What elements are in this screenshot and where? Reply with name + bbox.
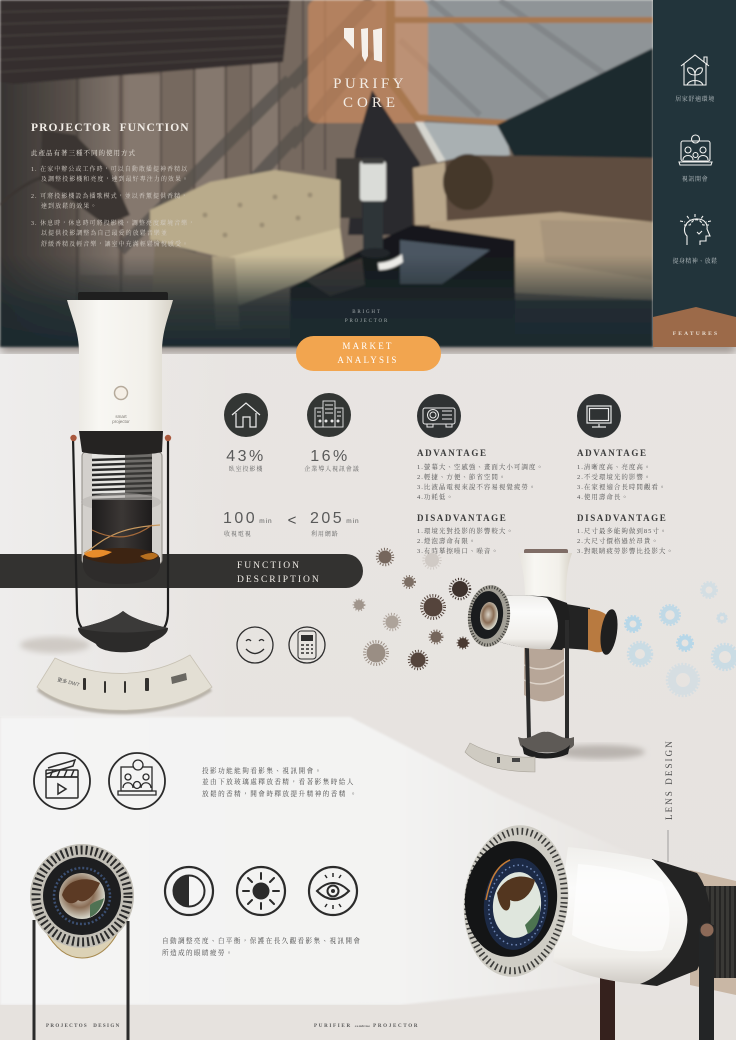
comparison column: projector: 2.輕捷、方便、節省空間。: [417, 472, 506, 481]
hero text: projector function: [31, 122, 195, 248]
stat: 16 percent: [304, 448, 360, 473]
footer captions: PROJECTOS DESIGN: [46, 1024, 121, 1029]
comparison column: television: 4.使用壽命長。: [577, 492, 629, 501]
comparison column: projector: 1.環境光對投影的影響較大。: [417, 526, 514, 535]
text: eye protection: 所造成的眼睛疲勞。: [162, 948, 234, 957]
hero text: projector function: PROJECTOR FUNCTION: [31, 122, 190, 134]
hero text: projector function: 及調整投影機和亮度，達到最好專注力的效果。: [41, 175, 189, 183]
comparison column: television: 2.大尺寸價格過於昂貴。: [577, 536, 659, 545]
window: [392, 0, 653, 122]
comparison column: television: 1.尺寸最多能夠做到85寸。: [577, 526, 667, 535]
tall projector product: [20, 292, 173, 653]
table: [290, 225, 515, 347]
comparison column: projector: ADVANTAGE: [417, 448, 488, 458]
comparison column: projector: DISADVANTAGE: [417, 513, 507, 523]
mini projector: [360, 161, 386, 201]
tall projector product: smart: [115, 414, 127, 419]
logo: [333, 28, 407, 111]
text: projection function: [202, 766, 358, 798]
icon: contrast: [165, 867, 213, 915]
lens design label: [664, 739, 674, 862]
feature icon: refresh: [680, 214, 711, 245]
hero text: projector function: 1. 在家中辦公或工作時，可以自動散播提神香精以: [31, 165, 188, 173]
bright projector caption: BRIGHT: [352, 310, 382, 315]
text: projection function: 並由下放玻璃處釋放香精，看著影集時給人: [202, 777, 355, 786]
function description band: FUNCTION: [237, 561, 301, 571]
hero text: projector function: 達到放鬆的效果。: [41, 202, 97, 210]
light lower panel: [0, 717, 736, 1040]
right sofa: [413, 155, 653, 230]
comparison column: television: [577, 448, 674, 555]
hero text: projector function: 舒緩香精及輕音樂，讓室中充滿輕鬆愉悅感受。: [41, 240, 189, 248]
comparison column: television: 3.對眼睛疲勞影響比投影大。: [577, 546, 674, 555]
logo mark: [344, 28, 382, 62]
stat icon: office building: [307, 393, 351, 437]
stat: 43 percent: 臥室投影機: [229, 465, 263, 473]
features tag text: FEATURES: [673, 331, 719, 337]
function description band: DESCRIPTION: [237, 575, 321, 585]
icon: television: [577, 394, 621, 438]
icon: video call: [109, 753, 165, 809]
small lens front view: [30, 844, 134, 1040]
stat: 43 percent: 43%: [226, 448, 266, 465]
text: projection function: 投影功能能夠看影集、視訊開會。: [202, 766, 323, 775]
stat: 16 percent: 16%: [310, 448, 350, 465]
icon: film clapper: [34, 753, 90, 809]
icon: brightness: [237, 867, 285, 915]
icon: remote: [289, 627, 325, 663]
comparison column: television: DISADVANTAGE: [577, 513, 667, 523]
text: projection function: 放鬆的香精，開會時釋放提升精神的香精 。: [202, 789, 358, 798]
stat: 100 min: 100 min: [223, 510, 273, 527]
market analysis pill: MARKET: [342, 341, 394, 351]
icon: smile: [237, 627, 273, 663]
feature label: meeting: 視訊開會: [682, 175, 708, 183]
hero text: projector function: 2. 可將投影機設為播歌模式，並以香薰提供香精，: [31, 192, 188, 200]
side projector product: [465, 549, 645, 772]
comparison column: projector: 2.燈泡壽命有限。: [417, 536, 476, 545]
feature icon: home: [681, 55, 709, 85]
tall projector product: projector: [112, 419, 130, 424]
large lens close-up: [456, 820, 736, 1040]
hero photo: living room: [0, 0, 736, 352]
comparison column: projector: 3.比液晶電視來說不容易視覺疲勞。: [417, 482, 536, 491]
stat: 100 min: 收視電視: [224, 530, 252, 538]
feature icon: video meeting: [679, 135, 712, 165]
stat: 43 percent: [226, 448, 266, 473]
comparison column: television: ADVANTAGE: [577, 448, 648, 458]
stat: 100 min: [223, 510, 273, 538]
stat: 16 percent: 企業導入視訊會議: [304, 465, 360, 473]
stat: 205 min: [310, 510, 360, 538]
feature label: relax: 提身精神、放鬆: [673, 257, 717, 265]
comparison column: television: 1.清晰度高、亮度高。: [577, 462, 651, 471]
function description band: [0, 554, 363, 588]
clean air particles: [625, 582, 736, 696]
brand name: CORE: [343, 95, 399, 111]
stat icon: home: [224, 393, 268, 437]
text: eye protection: 自動調整亮度、白平衡，保護在長久觀看影集、視訊開會: [162, 936, 361, 945]
connector strip: [37, 655, 212, 714]
stat: 205 min: 利用網路: [311, 530, 339, 538]
virus particles: [354, 549, 470, 669]
lens design label: LENS DESIGN: [664, 739, 674, 820]
hero text: projector function: 此產品有著三種不同的使用方式: [31, 148, 136, 157]
market analysis pill: [296, 336, 441, 371]
icon: eye: [309, 867, 357, 915]
right panel: features: [653, 0, 736, 347]
comparison column: projector: 1.螢幕大、空感強、畫面大小可調度。: [417, 462, 544, 471]
bright projector caption: PROJECTOR: [345, 319, 389, 324]
comparison column: projector: [417, 448, 544, 555]
text: eye protection: [162, 936, 361, 957]
comparison column: television: 2.不受環境光的影響。: [577, 472, 651, 481]
comparison column: television: 3.在家裡適合長時間觀看。: [577, 482, 666, 491]
comparison column: projector: 4.功耗低。: [417, 492, 454, 501]
comparison column: projector: 3.有時摹擦噪口、噪音。: [417, 546, 499, 555]
hero text: projector function: 3. 休息時，休息時可將投影機，調整亮度環境音樂，: [31, 219, 195, 227]
comparison sign: <: [288, 512, 297, 529]
footer captions: [46, 1024, 419, 1029]
connector strip: 更多 DWT: [57, 676, 80, 688]
feature label: home: 居家舒適環境: [675, 95, 715, 103]
brand name: PURIFY: [333, 76, 407, 92]
stat: 205 min: 205 min: [310, 510, 360, 527]
hero text: projector function: 以提供投影調整為自己最愛的放鬆音樂並: [41, 229, 168, 237]
left sofa: [150, 170, 340, 258]
footer captions: PURIFIER combine PROJECTOR: [314, 1024, 419, 1029]
icon: projector: [417, 394, 461, 438]
market analysis pill: ANALYSIS: [337, 355, 399, 365]
